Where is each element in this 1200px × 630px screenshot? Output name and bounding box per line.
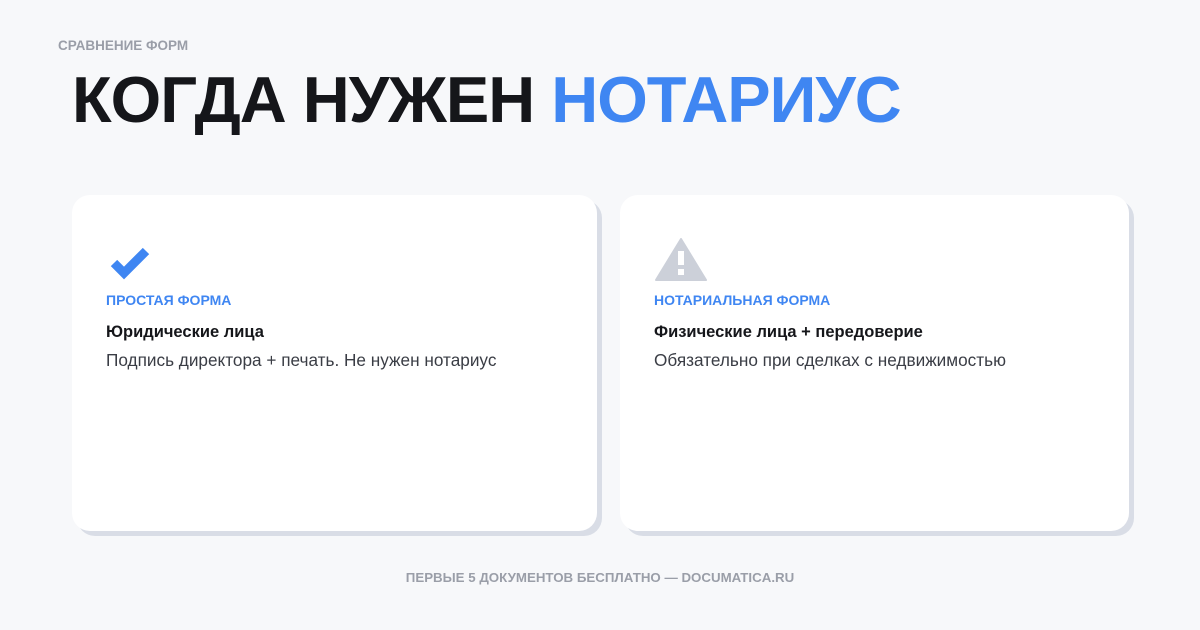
icon: warning	[655, 238, 707, 281]
label: НОТАРИАЛЬНАЯ ФОРМА	[654, 292, 830, 308]
text: Обязательно при сделках с недвижимостью	[654, 350, 1006, 370]
heading: Юридические лица	[106, 323, 264, 341]
label: ПРОСТАЯ ФОРМА	[106, 292, 231, 308]
footer: ПЕРВЫЕ 5 ДОКУМЕНТОВ БЕСПЛАТНО — DOCUMATICA.RU	[406, 570, 794, 585]
icon: check	[110, 248, 150, 280]
heading: Физические лица + передоверие	[654, 323, 923, 341]
panel: simple form	[72, 195, 597, 531]
panel: notarial form	[620, 195, 1129, 531]
title: КОГДА НУЖЕН НОТАРИУС	[72, 63, 901, 136]
text: Подпись директора + печать. Не нужен нотариус	[106, 350, 496, 370]
kicker: СРАВНЕНИЕ ФОРМ	[58, 38, 188, 53]
